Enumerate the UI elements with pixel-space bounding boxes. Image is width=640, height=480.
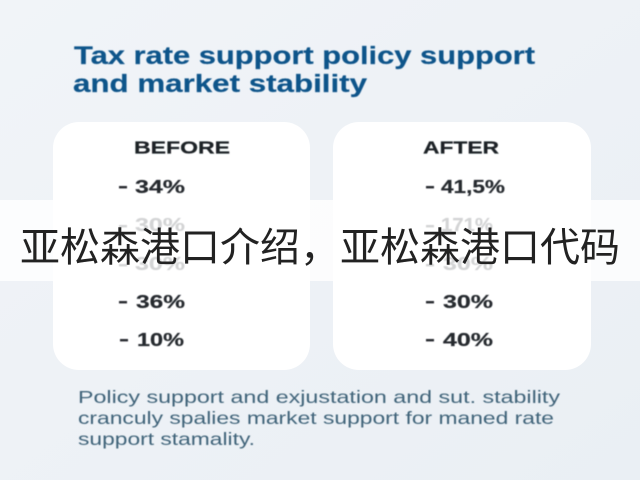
after values	[426, 177, 505, 350]
before values: 30%	[135, 215, 185, 235]
before values: 36%	[136, 292, 185, 312]
after values: 171%	[441, 215, 493, 235]
after values: 41,5%	[441, 177, 505, 197]
description text: cranculy spalies market support for maned rate	[78, 408, 554, 428]
description text	[78, 387, 560, 449]
before values: 34%	[135, 177, 185, 197]
after values: 40%	[443, 330, 493, 350]
panel: before	[53, 122, 310, 370]
panel: after	[333, 122, 591, 370]
overlay banner	[0, 200, 640, 281]
title: and market stability	[73, 70, 367, 98]
description text: Policy support and exjustation and sut. stability	[78, 387, 560, 407]
heading: before: BEFORE	[134, 138, 230, 158]
description text: support stamality.	[78, 429, 255, 449]
title	[73, 42, 536, 98]
banner text: 亚松森港口介绍，亚松森港口代码	[20, 226, 620, 270]
before values: 10%	[137, 330, 184, 350]
before values	[119, 177, 185, 350]
before values: 30%	[135, 254, 185, 274]
title: Tax rate support policy support	[74, 42, 536, 70]
after values: 30%	[443, 254, 493, 274]
after values: 30%	[443, 292, 493, 312]
heading: after: AFTER	[423, 138, 499, 158]
